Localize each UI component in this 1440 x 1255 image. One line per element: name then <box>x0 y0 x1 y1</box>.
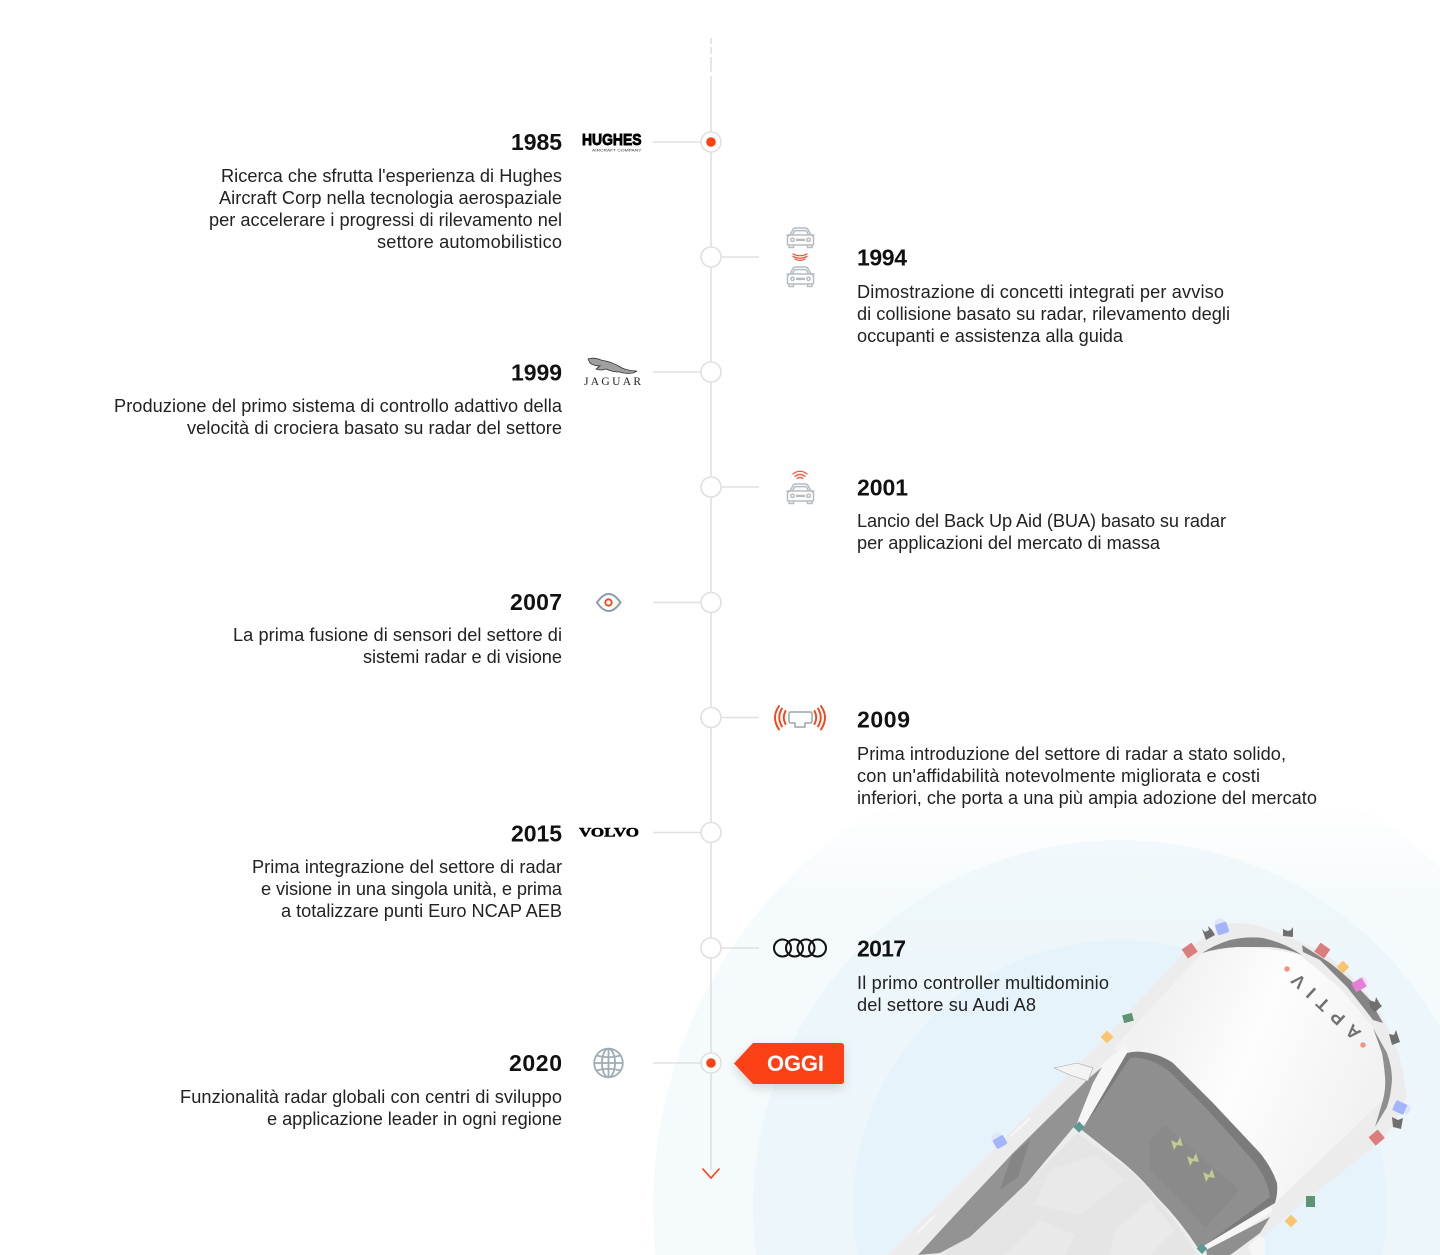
sensors <box>1182 943 1385 1146</box>
icon: Jaguar logo: JAGUAR <box>584 376 641 388</box>
entry 2020: 2020 <box>509 1050 562 1076</box>
timeline branches and nodes <box>653 132 759 1073</box>
entry 2009: con un'affidabilità notevolmente migliorata e costi <box>857 766 1260 786</box>
entry 1994: occupanti e assistenza alla guida <box>857 326 1124 346</box>
entry 2020: e applicazione leader in ogni regione <box>267 1109 562 1129</box>
entry 1994: Dimostrazione di concetti integrati per avviso <box>857 282 1224 302</box>
entry 1985: settore automobilistico <box>377 232 562 252</box>
entry 2017 <box>857 936 1109 1015</box>
entry 2017: del settore su Audi A8 <box>857 995 1036 1015</box>
entry 2015: 2015 <box>511 821 562 847</box>
timeline axis <box>710 38 712 1170</box>
callout: OGGI tag <box>734 1043 844 1084</box>
background radar circles <box>653 740 1440 1255</box>
icon: Jaguar logo <box>584 358 641 388</box>
icon: Volvo logo: VOLVO <box>579 826 639 840</box>
entry 1994: 1994 <box>857 245 907 271</box>
entry 1985: Ricerca che sfrutta l'esperienza di Hughes <box>221 166 562 186</box>
icon: solid state radar <box>775 706 825 730</box>
arrow: timeline end chevron <box>702 1168 720 1178</box>
Aptiv logo: APTIV <box>1287 970 1365 1044</box>
entry 1985: 1985 <box>511 129 562 155</box>
illustration: car with sensors <box>888 918 1410 1255</box>
entry 2015: e visione in una singola unità, e prima <box>261 879 563 899</box>
entry 2009 <box>857 707 1317 808</box>
icon: globe <box>594 1049 623 1077</box>
entry 2009: inferiori, che porta a una più ampia adozione del mercato <box>857 788 1317 808</box>
entry 2017: 2017 <box>857 936 906 962</box>
entry 2001: 2001 <box>857 475 908 501</box>
entry 1985 <box>209 129 562 252</box>
left side window <box>918 1067 1102 1255</box>
windshield <box>1082 1052 1277 1248</box>
hood <box>1112 947 1390 1203</box>
entry 2001 <box>857 475 1226 553</box>
entry 2015: a totalizzare punti Euro NCAP AEB <box>281 901 562 921</box>
entry 1999: 1999 <box>511 360 562 386</box>
entry 2001: Lancio del Back Up Aid (BUA) basato su radar <box>857 511 1226 531</box>
entry 1985: per accelerare i progressi di rilevamento nel <box>209 210 562 230</box>
right side window <box>1206 1217 1270 1255</box>
entry 2015 <box>252 821 563 921</box>
icon: eye <box>597 594 620 611</box>
icon: two cars with radar waves <box>786 228 814 286</box>
entry 1994: di collisione basato su radar, rilevamento degli <box>857 304 1230 324</box>
entry 1999 <box>114 360 563 438</box>
roof interior <box>943 1133 1197 1255</box>
headlights <box>1202 937 1302 955</box>
entry 2020 <box>180 1050 562 1129</box>
entry 2007 <box>233 589 562 667</box>
entry 1985: Aircraft Corp nella tecnologia aerospaziale <box>219 188 562 208</box>
entry 2007: sistemi radar e di visione <box>363 647 562 667</box>
entry 2009: 2009 <box>857 707 910 733</box>
left door handles <box>917 1118 1030 1233</box>
icon: Audi rings <box>774 940 826 956</box>
mirrors <box>1054 1063 1093 1081</box>
entry 2007: La prima fusione di sensori del settore di <box>233 625 562 645</box>
entry 2001: per applicazioni del mercato di massa <box>857 533 1161 553</box>
icon: Hughes logo: HUGHES <box>582 132 642 149</box>
white pillars <box>1076 1045 1130 1130</box>
icon: Hughes logo: AIRCRAFT COMPANY <box>592 148 642 152</box>
entry 2017: Il primo controller multidominio <box>857 973 1109 993</box>
entry 2020: Funzionalità radar globali con centri di sviluppo <box>180 1087 562 1107</box>
entry 2009: Prima introduzione del settore di radar a stato solido, <box>857 744 1286 764</box>
car body <box>888 923 1407 1255</box>
entry 1999: velocità di crociera basato su radar del settore <box>187 418 562 438</box>
entry 1999: Produzione del primo sistema di controllo adattivo della <box>114 396 563 416</box>
entry 2015: Prima integrazione del settore di radar <box>252 857 562 877</box>
entry 1994 <box>857 245 1230 346</box>
icon: car with radar waves <box>786 471 814 504</box>
callout: OGGI tag: OGGI <box>767 1051 824 1076</box>
entry 2007: 2007 <box>510 589 562 615</box>
